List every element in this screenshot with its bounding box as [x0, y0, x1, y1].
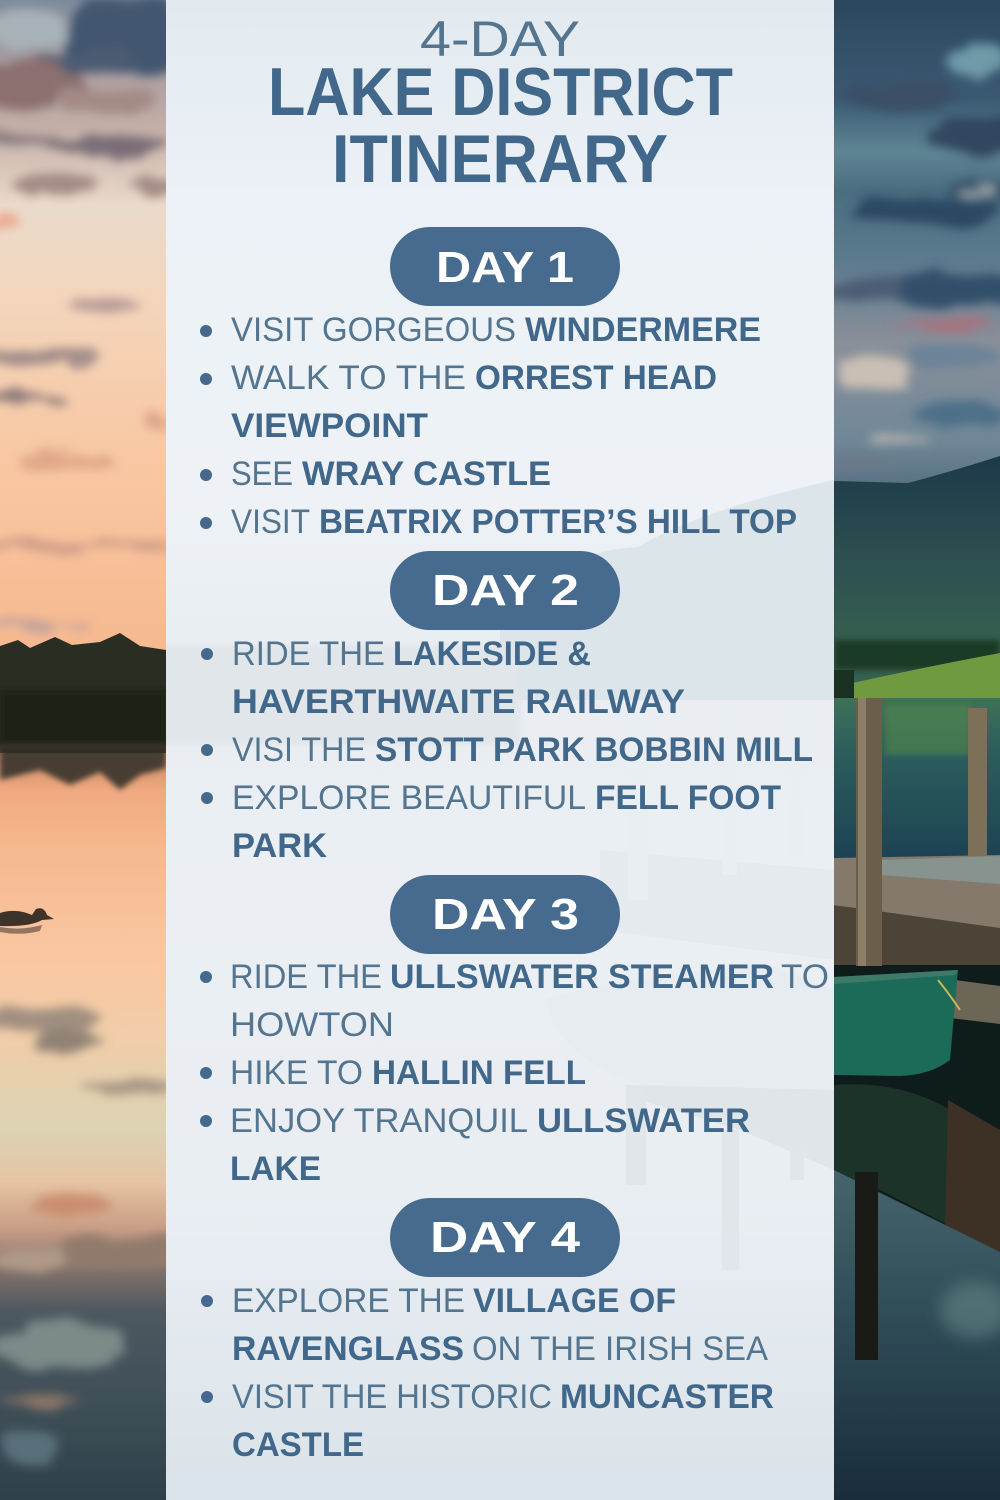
- bullet: Orrest Head: ORREST HEAD: [475, 359, 717, 397]
- bullet: steamer: RIDE THE: [230, 958, 382, 996]
- bullet: Windermere: WINDERMERE: [525, 311, 761, 349]
- bullet: Windermere: VISIT GORGEOUS: [231, 311, 516, 349]
- bullet: Ullswater Lake: LAKE: [230, 1150, 321, 1188]
- bullet: Ravenglass: VILLAGE OF: [473, 1282, 676, 1320]
- day 2 heading pill: [390, 551, 620, 630]
- day 3 list: [200, 958, 829, 1188]
- bullet: railway: [201, 635, 685, 721]
- bullet: Fell Foot: PARK: [232, 827, 327, 865]
- bullet: Hill Top: BEATRIX POTTER’S HILL TOP: [319, 503, 797, 541]
- bullet: Ravenglass: EXPLORE THE: [232, 1282, 465, 1320]
- bullet: Bobbin Mill: VISI THE: [232, 731, 366, 769]
- day 3 heading pill: [390, 875, 620, 954]
- bullet: Hallin Fell: [200, 1054, 586, 1092]
- bullet: Muncaster Castle: VISIT THE HISTORIC: [232, 1378, 552, 1416]
- title line: 4-day: 4-DAY: [420, 11, 580, 67]
- day 1 heading pill: DAY 1: [436, 243, 574, 292]
- bullet: Ullswater Lake: ENJOY TRANQUIL: [230, 1102, 528, 1140]
- bullet: steamer: ULLSWATER STEAMER: [390, 958, 774, 996]
- day 1 list: [200, 311, 797, 541]
- day 4 heading pill: [390, 1198, 620, 1277]
- day 2 list: [201, 635, 813, 865]
- bullet: Ravenglass: ON THE IRISH SEA: [472, 1330, 768, 1368]
- day 1 heading pill: [390, 227, 620, 306]
- bullet: Wray Castle: SEE: [231, 455, 293, 493]
- bullet: Wray Castle: [200, 455, 551, 493]
- photo: hills, jetty and green boat, right side: [820, 0, 1000, 1500]
- bullet: Muncaster Castle: CASTLE: [232, 1426, 364, 1464]
- bullet: Ullswater Lake: [200, 1102, 750, 1188]
- day 2 heading pill: DAY 2: [432, 566, 579, 615]
- bullet: Orrest Head: [200, 359, 717, 445]
- bullet: steamer: TO: [781, 958, 829, 996]
- bullet: Muncaster Castle: [201, 1378, 774, 1464]
- bullet: Ravenglass: RAVENGLASS: [232, 1330, 464, 1368]
- bullet: Ullswater Lake: ULLSWATER: [537, 1102, 750, 1140]
- faded hill behind panel: [500, 480, 834, 700]
- day 4 list: [201, 1282, 774, 1464]
- bullet: Windermere: [200, 311, 761, 349]
- bullet: Fell Foot: EXPLORE BEAUTIFUL: [232, 779, 586, 817]
- bullet: steamer: [200, 958, 829, 1044]
- bullet: Bobbin Mill: STOTT PARK BOBBIN MILL: [375, 731, 813, 769]
- bullet: Fell Foot: [201, 779, 781, 865]
- title line: Itinerary: ITINERARY: [332, 121, 668, 197]
- title line: Lake District: LAKE DISTRICT: [268, 54, 733, 130]
- bullet: Fell Foot: FELL FOOT: [595, 779, 781, 817]
- bullet: Ravenglass: [201, 1282, 768, 1368]
- bullet: railway: LAKESIDE &: [393, 635, 591, 673]
- photo: lake at sunset, left side: [0, 0, 166, 1500]
- bullet: Hallin Fell: HALLIN FELL: [372, 1054, 586, 1092]
- icon: duck on the water: [0, 908, 54, 934]
- bullet: Wray Castle: WRAY CASTLE: [302, 455, 551, 493]
- panel: translucent white column: [150, 0, 834, 1500]
- bullet: railway: RIDE THE: [232, 635, 385, 673]
- faded jetty behind panel: [626, 1085, 834, 1230]
- bullet: steamer: HOWTON: [230, 1006, 394, 1044]
- bullet: Orrest Head: WALK TO THE: [231, 359, 466, 397]
- bullet: Orrest Head: VIEWPOINT: [231, 407, 428, 445]
- faded tree line behind panel: [166, 648, 517, 742]
- day 3 heading pill: DAY 3: [432, 890, 579, 939]
- title: [268, 11, 733, 197]
- bullet: Hallin Fell: HIKE TO: [230, 1054, 363, 1092]
- bullet: railway: HAVERTHWAITE RAILWAY: [232, 683, 685, 721]
- bullet: Muncaster Castle: MUNCASTER: [560, 1378, 774, 1416]
- day 4 heading pill: DAY 4: [430, 1213, 581, 1262]
- bullet: Hill Top: VISIT: [231, 503, 310, 541]
